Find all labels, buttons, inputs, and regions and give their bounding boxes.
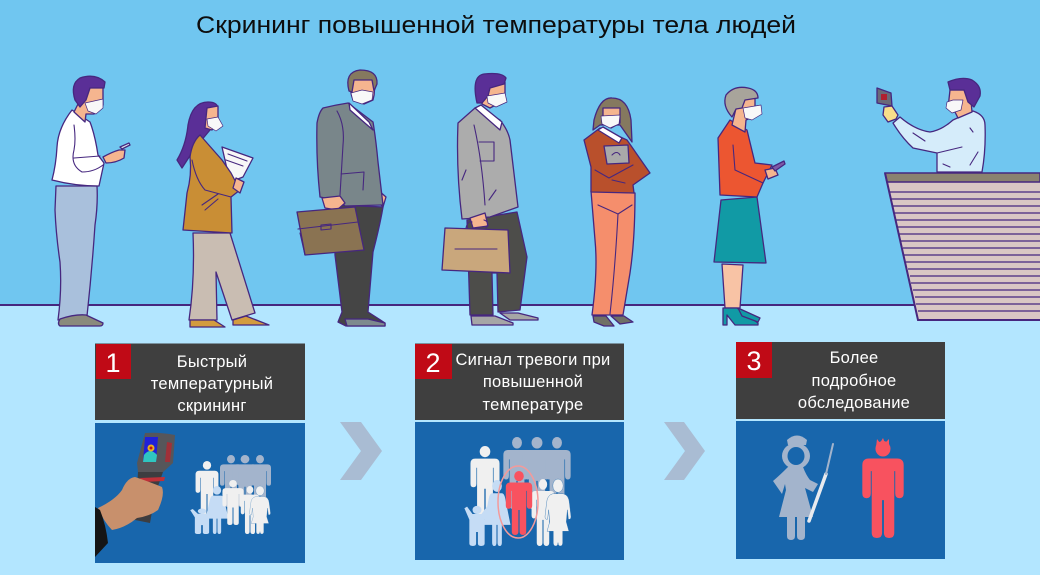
step number 3: 3	[746, 346, 762, 376]
floor	[0, 305, 1040, 575]
panel 2 image background	[415, 422, 624, 560]
panel 1: fast temperature screening	[95, 344, 305, 563]
thermometer screen	[881, 94, 887, 100]
panel 2 header	[415, 344, 624, 420]
panel 1 image background	[95, 423, 305, 563]
panel 3 heading: подробное	[812, 372, 896, 390]
doctor with thermometer	[877, 78, 985, 172]
icon: crowd of people	[190, 455, 271, 534]
step number 3	[736, 342, 772, 378]
red person	[506, 471, 532, 535]
panel 2 heading: повышенной	[483, 373, 583, 391]
person 4: man with tan bag	[442, 74, 538, 325]
icon: hand with thermal camera	[95, 433, 175, 557]
person 6: older woman in teal skirt	[714, 87, 785, 325]
panel 2 heading: температуре	[483, 396, 583, 414]
person 3: man with dark briefcase	[297, 70, 386, 326]
arrow 1	[340, 422, 382, 480]
panel 3: detailed examination	[736, 342, 945, 559]
panel 1 heading: Быстрый	[177, 353, 247, 371]
person 5: woman with tablet	[584, 98, 650, 326]
panel 2 heading: Сигнал тревоги при	[456, 351, 610, 369]
person 2: woman with documents	[177, 102, 269, 327]
panel 1 header	[95, 344, 305, 420]
panel 2: high temperature alarm	[415, 344, 624, 560]
step number 1	[96, 344, 131, 379]
reception desk	[885, 173, 1040, 320]
step number 2	[415, 344, 452, 379]
panel 3 heading: обследование	[798, 394, 910, 412]
panel 3 header	[736, 342, 945, 419]
step number 2: 2	[425, 348, 441, 378]
background wall	[0, 0, 1040, 305]
icon: nurse with thermometer	[773, 436, 833, 540]
title: Скрининг повышенной температуры тела людей	[196, 12, 796, 39]
icon: red person with fever	[862, 438, 904, 538]
person 1: man with phone	[52, 76, 130, 326]
step number 1: 1	[105, 348, 121, 378]
panel 1 heading: скрининг	[177, 397, 247, 415]
arrow 2	[664, 422, 705, 480]
panel 3 heading: Более	[830, 349, 878, 367]
icon: crowd with red highlighted person	[464, 437, 571, 546]
highlight ellipse	[498, 466, 538, 538]
panel 1 heading: температурный	[151, 375, 273, 393]
panel 3 image background	[736, 421, 945, 559]
